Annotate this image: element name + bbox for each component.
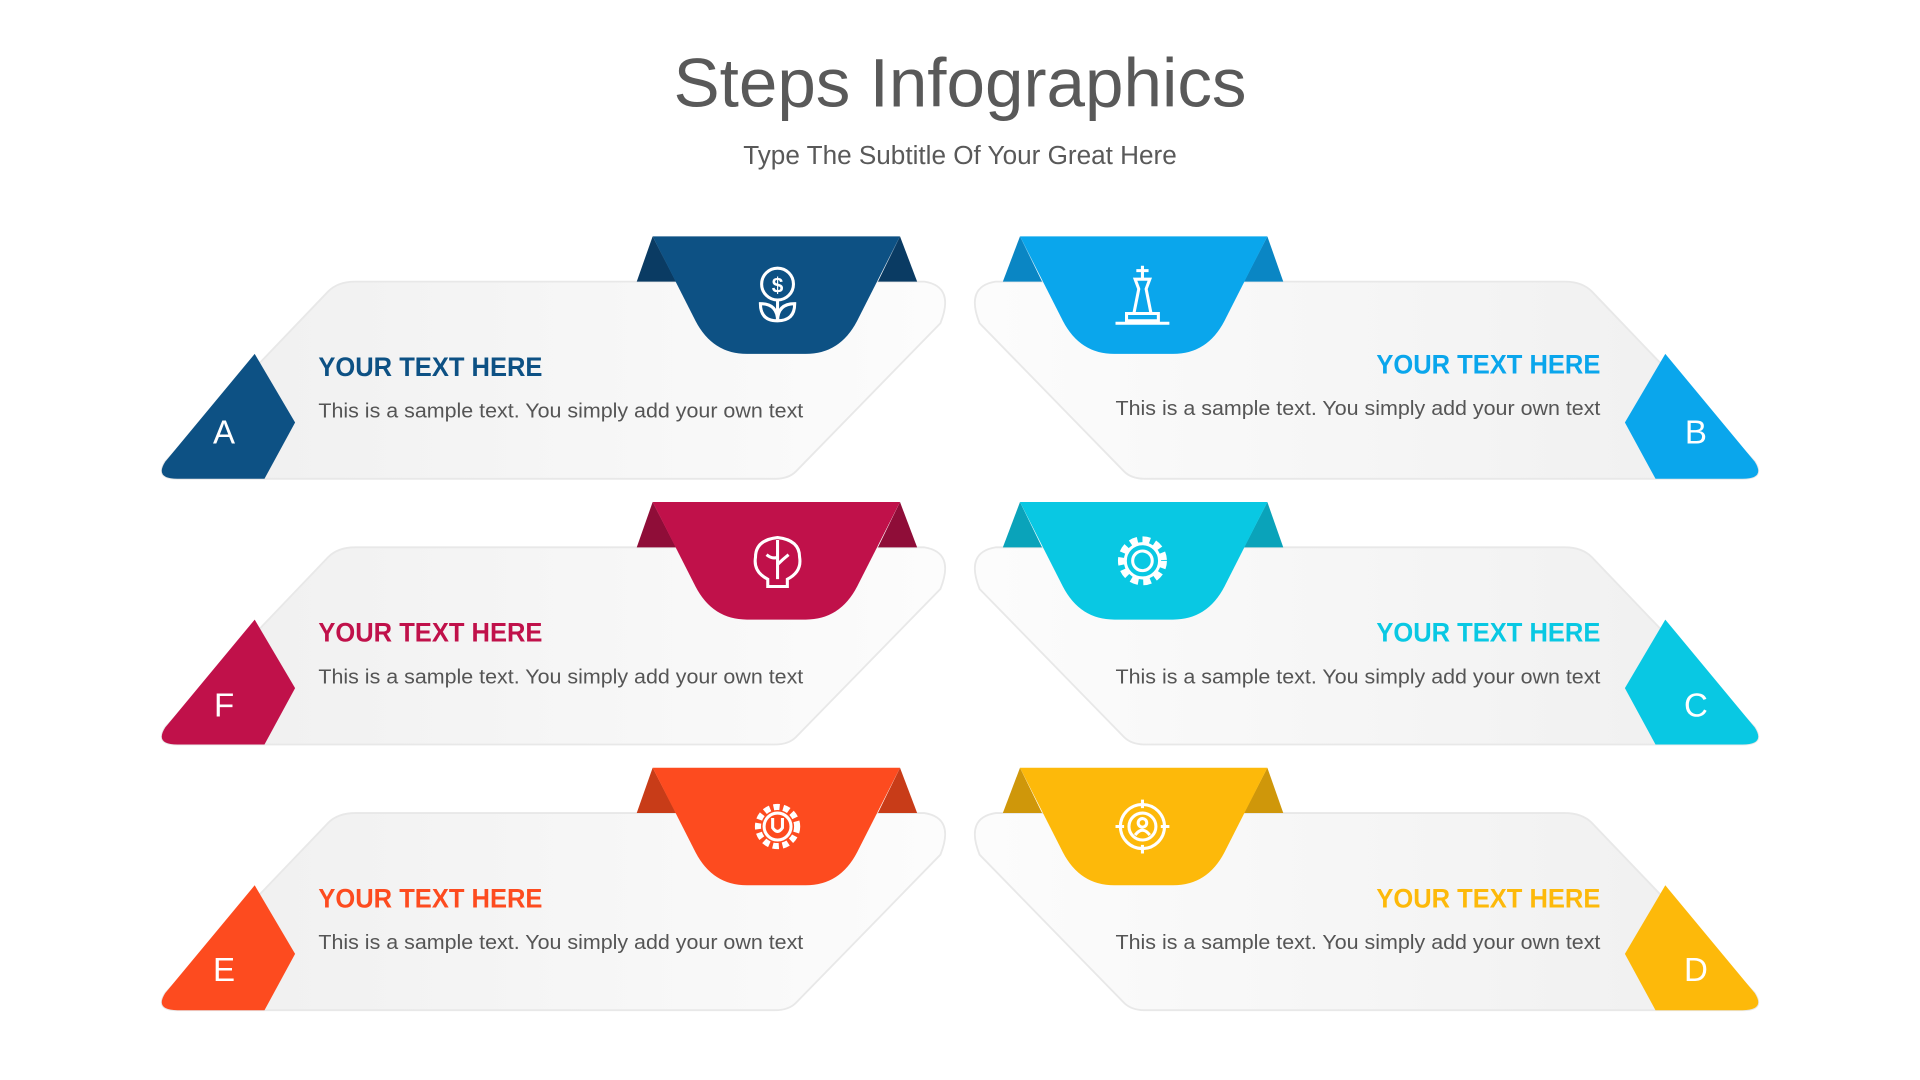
panel: E: YOUR TEXT HERE [318,883,542,913]
panel: A [162,236,945,479]
icon: gear [1122,540,1163,582]
icon: money plant [760,268,795,321]
icon: money plant: $ [772,275,784,298]
panel: E: This is a sample text. You simply add your own text [318,932,804,954]
panel: D: This is a sample text. You simply add your own text [1116,932,1601,954]
icon: brain [755,538,800,587]
panel: A: YOUR TEXT HERE [318,352,542,382]
icon: gear wrench [758,807,797,846]
panel: F: This is a sample text. You simply add your own text [318,666,804,688]
panel: F: F [214,687,234,724]
panel: A: This is a sample text. You simply add your own text [318,401,804,423]
panel: D: YOUR TEXT HERE [1376,883,1600,913]
panel: C: YOUR TEXT HERE [1376,618,1600,648]
panel: B: B [1685,414,1707,451]
panel: C: This is a sample text. You simply add your own text [1116,666,1601,688]
panel: D: D [1684,952,1708,989]
panel: F: YOUR TEXT HERE [318,618,542,648]
panel: B [975,236,1758,479]
title: Steps Infographics [673,45,1247,122]
icon: chess king [1116,266,1169,323]
icon: target user [1116,800,1169,853]
panel: F [162,502,945,744]
panel: E [162,768,945,1010]
subtitle: Type The Subtitle Of Your Great Here [743,142,1177,170]
panel: B: This is a sample text. You simply add your own text [1116,398,1601,420]
panel: C [975,502,1758,744]
panel: E: E [213,952,235,989]
panel: C: C [1684,687,1708,724]
panel: A: A [213,414,235,451]
panel: D [975,768,1758,1010]
panel: B: YOUR TEXT HERE [1376,349,1600,379]
